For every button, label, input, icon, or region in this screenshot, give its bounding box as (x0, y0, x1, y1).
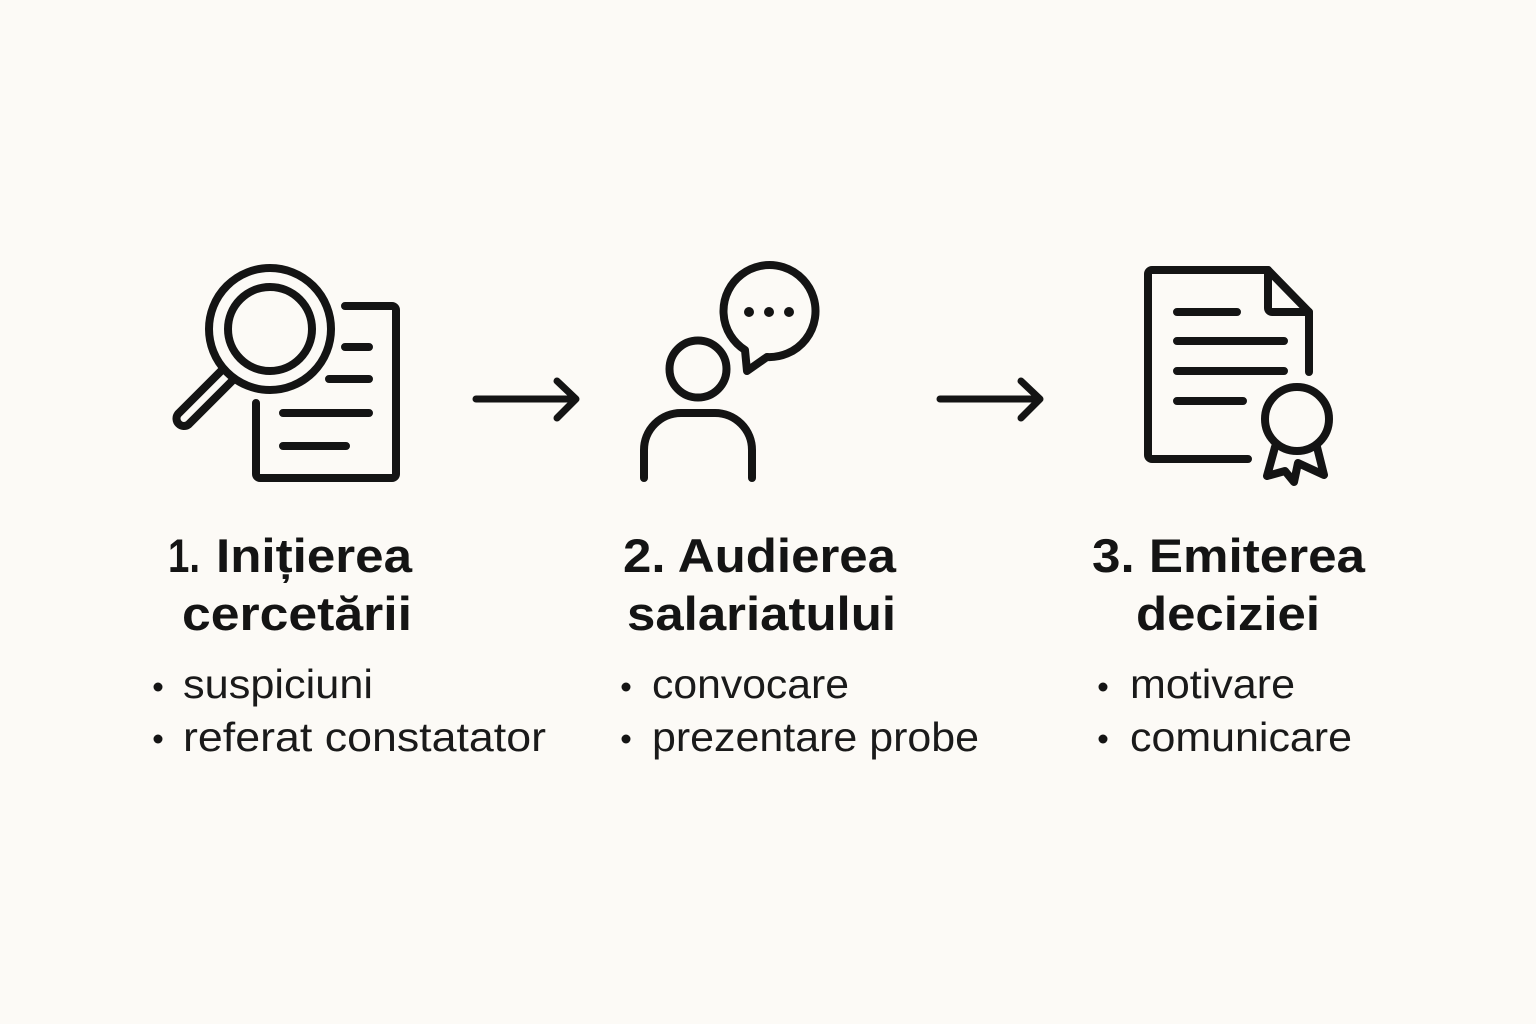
icon: magnifying glass over document (177, 268, 396, 478)
arrow: step 2 to step 3 (940, 381, 1040, 418)
panel: step 2 (622, 265, 979, 760)
panel: step 1 (154, 268, 546, 760)
list: step 2 items: convocare (652, 661, 849, 707)
heading: step 1: 1. (168, 529, 200, 582)
arrow: step 1 to step 2 (476, 381, 576, 418)
panel: step 3 (1092, 270, 1366, 760)
icon: document with seal (1148, 270, 1329, 482)
list: step 2 items (622, 661, 979, 760)
heading: step 1: Inițierea (216, 529, 413, 583)
list: step 1 items (154, 661, 546, 760)
list: step 1 items: referat constatator (183, 714, 546, 760)
heading: step 3: 3. Emiterea (1092, 529, 1366, 582)
list: step 3 items (1098, 661, 1352, 760)
heading: step 3: deciziei (1136, 587, 1320, 640)
list: step 3 items: comunicare (1130, 714, 1352, 760)
icon: person with speech bubble (644, 265, 816, 478)
heading: step 2: salariatului (627, 587, 896, 640)
list: step 1 items: suspiciuni (183, 661, 373, 707)
heading: step 1: cercetării (182, 587, 412, 640)
list: step 3 items: motivare (1130, 661, 1295, 707)
list: step 2 items: prezentare probe (652, 714, 979, 760)
heading: step 2: 2. Audierea (623, 529, 897, 582)
